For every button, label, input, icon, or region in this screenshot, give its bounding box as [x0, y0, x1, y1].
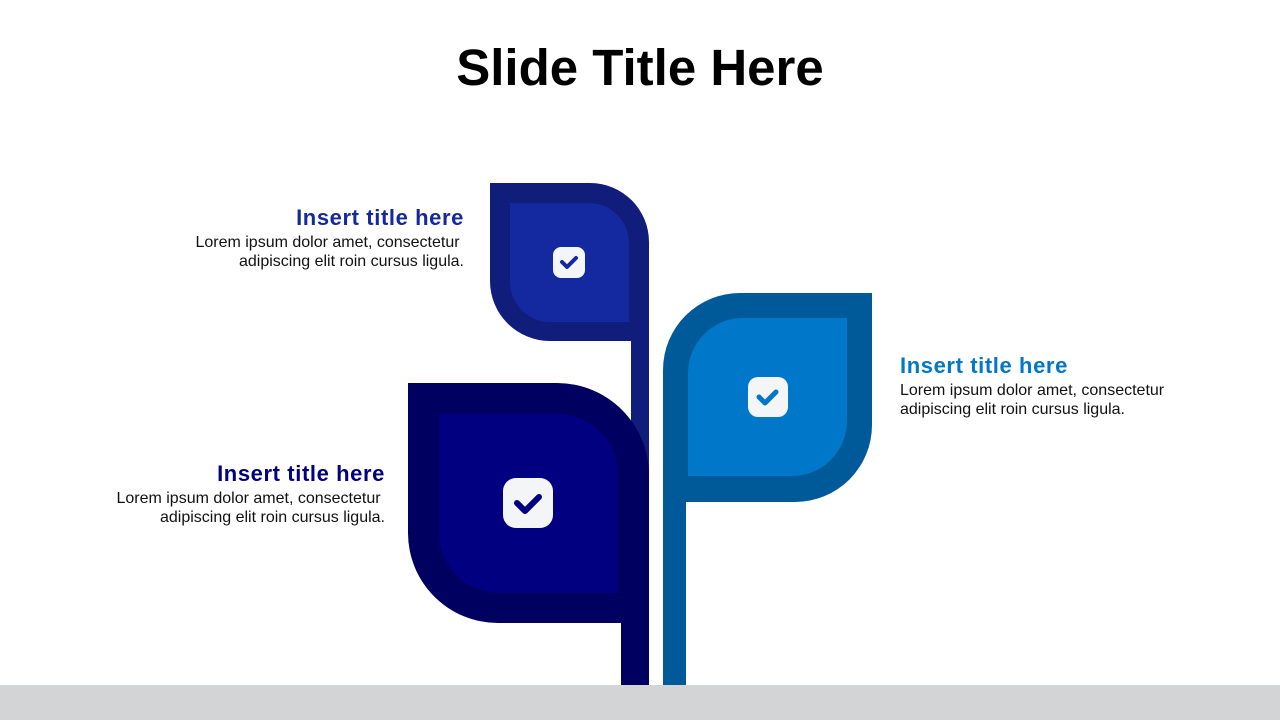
text block: right: Lorem ipsum dolor amet, consectetur: [900, 382, 1164, 399]
text block: bottom left: Lorem ipsum dolor amet, consectetur: [116, 490, 381, 507]
leaf: top: [490, 183, 649, 690]
footer bar: [0, 685, 1280, 720]
leaf: right: [663, 293, 872, 686]
text block: top left: Insert title here: [296, 205, 464, 230]
text block: top left: [195, 205, 464, 270]
text block: top left: adipiscing elit roin cursus ligula.: [239, 253, 464, 270]
text block: right: [900, 353, 1164, 418]
icon: check right: [748, 377, 788, 417]
icon: check large: [503, 478, 553, 528]
text block: top left: Lorem ipsum dolor amet, consectetur: [195, 234, 460, 251]
text block: bottom left: Insert title here: [217, 461, 385, 486]
text block: bottom left: adipiscing elit roin cursus ligula.: [160, 509, 385, 526]
icon: check top: [553, 247, 585, 278]
text block: right: adipiscing elit roin cursus ligula.: [900, 401, 1125, 418]
text block: right: Insert title here: [900, 353, 1068, 378]
leaf: bottom large: [408, 383, 649, 686]
title: Slide Title Here: [456, 39, 824, 96]
text block: bottom left: [116, 461, 385, 526]
